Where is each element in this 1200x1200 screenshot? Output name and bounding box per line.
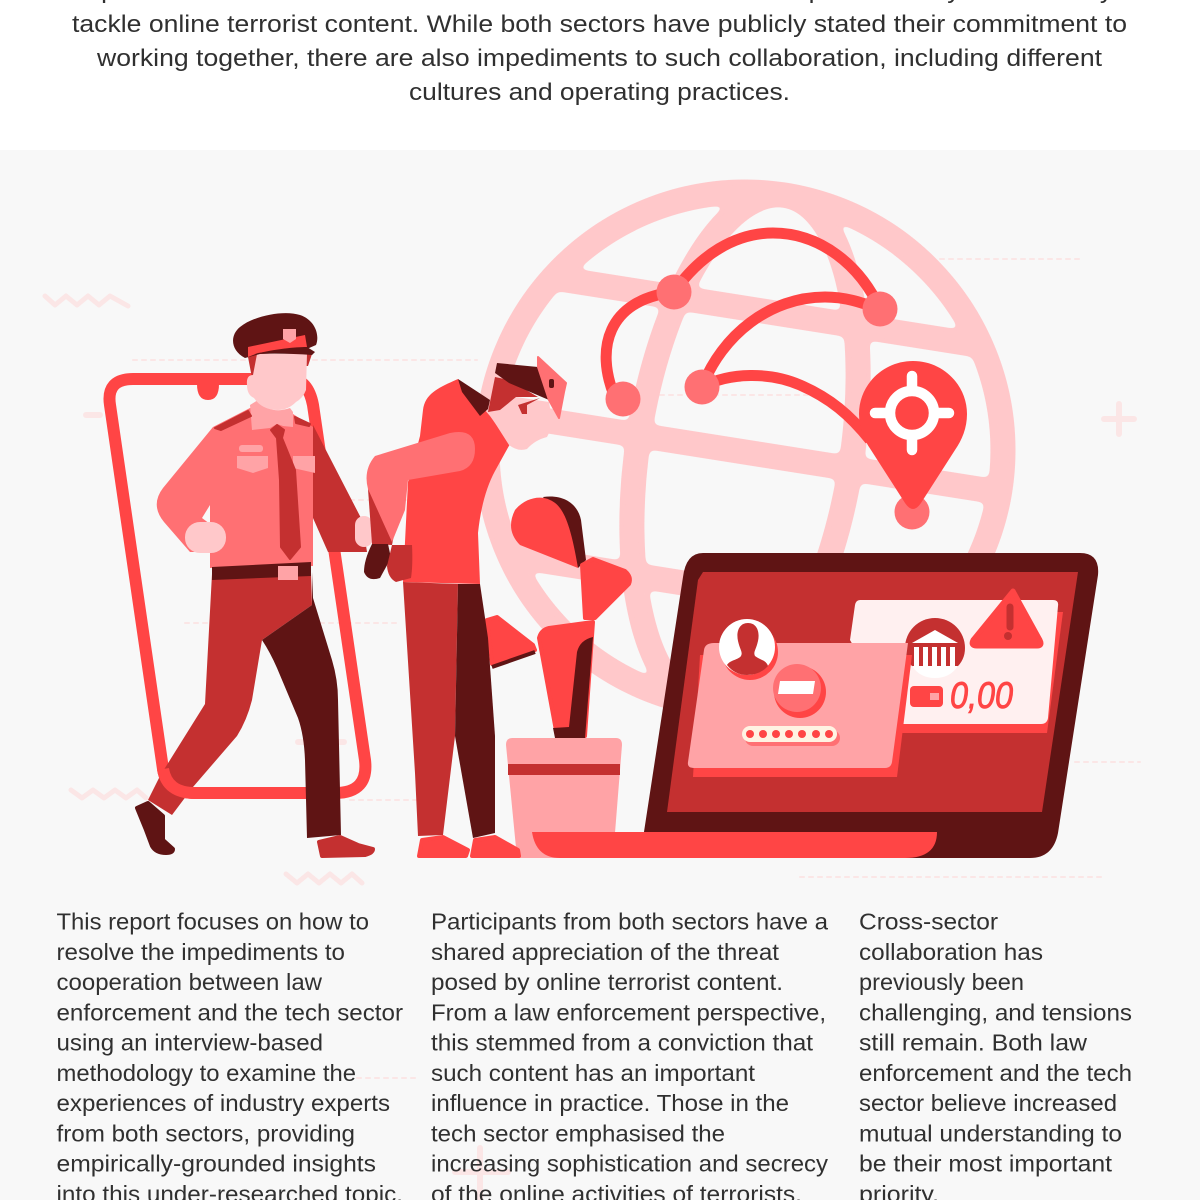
intro text block — [72, 0, 1127, 106]
suspect head — [488, 397, 553, 450]
intro text block: tackle online terrorist content. While both sectors have publicly stated their commitment to — [72, 11, 1127, 38]
report text: column 1: resolve the impediments to — [56, 939, 345, 965]
suspect far arm — [368, 489, 395, 545]
shirt pockets — [237, 445, 315, 473]
report text: column 2: From a law enforcement perspective, — [431, 999, 826, 1025]
phone outline — [109, 379, 365, 793]
wallet icon — [910, 686, 943, 707]
report text: column 3 — [859, 908, 1132, 1200]
officer tie — [271, 425, 300, 559]
network connection arcs — [606, 233, 880, 440]
balance value: 0,00 — [950, 675, 1013, 716]
report text: column 2: such content has an important — [431, 1060, 755, 1086]
bank icon — [905, 618, 965, 678]
officer right shoe — [319, 837, 373, 856]
report text: column 1: experiences of industry experts — [56, 1090, 390, 1116]
plant leaves — [543, 497, 586, 568]
suspect trousers — [403, 582, 458, 836]
report text: column 1 — [56, 908, 403, 1200]
report text: column 1: empirically-grounded insights — [56, 1150, 376, 1176]
network nodes — [606, 274, 930, 530]
officer face — [247, 354, 307, 410]
suspect hood and torso — [403, 379, 510, 584]
report text: column 2: shared appreciation of the threat — [431, 939, 779, 965]
officer trousers front leg — [148, 572, 312, 815]
report text: column 3: collaboration has — [859, 939, 1043, 965]
report text: column 2: posed by online terrorist content. — [431, 969, 783, 995]
officer collar — [250, 400, 293, 430]
report text: column 3: previously been — [859, 969, 1024, 995]
laptop — [532, 553, 1098, 858]
report text: column 3: challenging, and tensions — [859, 999, 1132, 1025]
report text: column 1: methodology to examine the — [56, 1060, 356, 1086]
report text: column 3: be their most important — [859, 1150, 1112, 1176]
intro text block: working together, there are also impediments to such collaboration, including different — [96, 45, 1102, 72]
illustration — [109, 178, 1098, 858]
suspect hair — [488, 377, 538, 412]
epaulettes — [215, 411, 310, 430]
location pin — [859, 361, 967, 509]
no-entry icon — [773, 664, 826, 718]
arm gap — [202, 505, 210, 524]
plant — [487, 497, 630, 858]
officer hair — [248, 352, 312, 378]
plant pot — [506, 738, 622, 858]
report text: column 3: mutual understanding to — [859, 1120, 1122, 1146]
phone corner over leg — [163, 769, 210, 793]
report text: column 2: this stemmed from a conviction that — [431, 1030, 813, 1056]
report text: column 3: Cross-sector — [859, 908, 998, 934]
hood lining — [458, 379, 490, 416]
cuffed hands — [364, 544, 391, 579]
report text: column 1: This report focuses on how to — [56, 908, 369, 934]
avatar — [719, 619, 778, 680]
password field — [742, 726, 840, 746]
officer left shoe — [137, 803, 173, 853]
report text: column 2: influence in practice. Those in the — [431, 1090, 789, 1116]
officer raised hand — [185, 522, 226, 553]
officer hand — [355, 516, 373, 547]
report text: column 2: increasing sophistication and secrecy — [431, 1150, 828, 1176]
bank card — [850, 591, 1063, 733]
report text: column 3: still remain. Both law — [859, 1030, 1088, 1056]
report text: column 1: using an interview-based — [56, 1030, 323, 1056]
officer shirt — [157, 408, 313, 568]
login card — [688, 619, 912, 777]
officer belt — [212, 562, 311, 580]
globe — [480, 180, 1016, 708]
officer hat — [233, 313, 317, 358]
report text: column 2: tech sector emphasised the — [431, 1120, 725, 1146]
background decorations — [45, 259, 1140, 1198]
report text: column 1: enforcement and the tech sector — [56, 999, 403, 1025]
police officer — [137, 313, 373, 856]
crosshair icon — [875, 376, 949, 450]
warning triangle — [972, 591, 1041, 646]
suspect shoes — [419, 837, 519, 856]
officer right arm — [313, 425, 367, 552]
belt buckle — [278, 566, 298, 580]
report text: column 3: sector believe increased — [859, 1090, 1117, 1116]
report text: column 2 — [431, 908, 829, 1200]
laptop body — [640, 553, 1098, 858]
report text: column 3: enforcement and the tech — [859, 1060, 1132, 1086]
laptop screen — [667, 572, 1078, 812]
report text: column 1: cooperation between law — [56, 969, 323, 995]
report text: column 1: from both sectors, providing — [56, 1120, 355, 1146]
laptop base — [532, 832, 937, 858]
suspect arm — [367, 432, 475, 542]
intro text block: cultures and operating practices. — [409, 79, 790, 106]
officer trousers back leg — [262, 572, 341, 838]
suspect cap — [495, 357, 566, 418]
pot stripe — [508, 764, 620, 775]
report text: column 2: Participants from both sectors have a — [431, 908, 829, 934]
handcuffed suspect — [364, 357, 566, 856]
phone notch — [197, 384, 219, 400]
